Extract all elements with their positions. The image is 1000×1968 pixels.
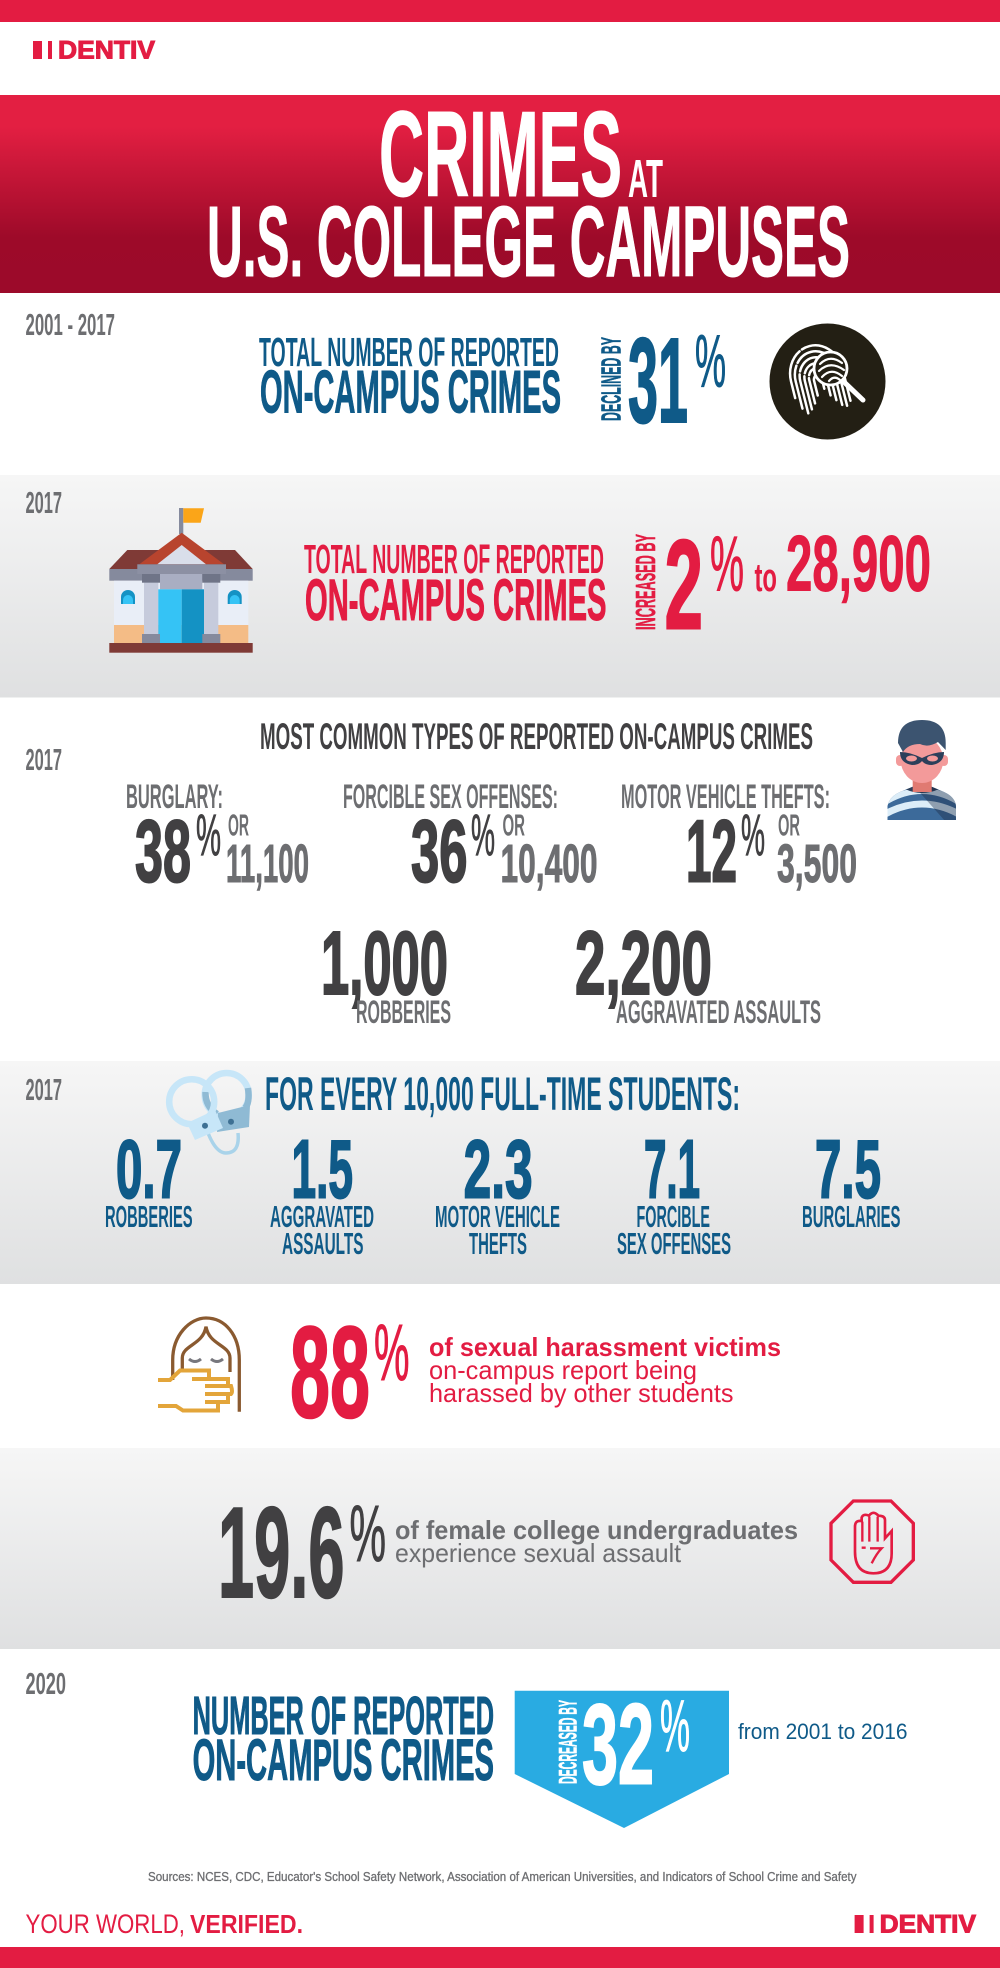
stat block: burglary: BURGLARY:	[126, 778, 223, 816]
tagline: VERIFIED.	[190, 1909, 303, 1939]
stat: burglaries rate	[802, 1122, 900, 1234]
stat block: forcible sex offenses: %	[471, 803, 495, 868]
stat block: motor vehicle thefts: OR	[778, 808, 800, 842]
connector: to: to	[754, 556, 777, 600]
panel: 2017 total increase	[0, 475, 1000, 698]
stat: aggravated assaults rate: ASSAULTS	[282, 1226, 364, 1261]
stat block: robberies: 1,000	[321, 914, 448, 1014]
year label: 2017	[26, 1072, 62, 1107]
description	[395, 1515, 798, 1568]
icon: masked thief	[888, 720, 956, 820]
stat: 19.6: 19.6	[218, 1481, 344, 1625]
arrow badge	[515, 1691, 729, 1828]
stat: forcible sex offenses rate	[617, 1122, 731, 1261]
stat: 88: 88	[290, 1299, 370, 1445]
icon: fingerprint and magnifier	[770, 324, 886, 440]
sources note: Sources: NCES, CDC, Educator's School Safety Network, Association of American Universities, and Indicators of School Crime and Safety	[148, 1870, 857, 1884]
stat: motor vehicle thefts rate: THEFTS	[469, 1226, 527, 1261]
stat: 2: 2	[664, 514, 703, 656]
stat: 32: 32	[582, 1682, 654, 1808]
icon: stop hand	[831, 1501, 913, 1582]
panel: 2020 decrease: %	[660, 1686, 690, 1767]
icon: college building	[109, 508, 253, 653]
panel: 2001-2017 decline: ON-CAMPUS CRIMES	[260, 358, 561, 426]
stat block: forcible sex offenses: 10,400	[500, 834, 598, 894]
description: on-campus report being	[429, 1355, 697, 1385]
logo: Identiv header: DENTIV	[58, 36, 155, 64]
stat block: robberies	[321, 914, 451, 1030]
stat block: forcible sex offenses	[343, 778, 598, 900]
heading line 2: ON-CAMPUS CRIMES	[193, 1728, 494, 1793]
stat block: burglary: 11,100	[226, 834, 309, 894]
panel: rates per 10,000 students	[0, 1061, 1000, 1284]
title: AT: AT	[628, 149, 663, 209]
stat block: forcible sex offenses: 36	[411, 802, 468, 900]
stat block: burglary: %	[196, 803, 221, 868]
stat block: burglary	[126, 778, 309, 900]
stat block: motor vehicle thefts: 12	[686, 802, 737, 900]
stat: forcible sex offenses rate: FORCIBLE	[636, 1199, 710, 1234]
stat block: burglary: 38	[135, 802, 191, 900]
title: CRIMES: CRIMES	[379, 86, 622, 222]
stat: robberies rate	[105, 1122, 193, 1234]
top red bar	[0, 0, 1000, 22]
stat block: burglary: OR	[228, 808, 249, 842]
description	[429, 1332, 781, 1408]
panel: sexual assault	[0, 1448, 1000, 1649]
year label: 2020	[26, 1666, 66, 1701]
panel: 2020 decrease: NUMBER OF REPORTED	[193, 1686, 494, 1746]
panel: 2001-2017 decline: DECLINED BY	[596, 337, 626, 421]
stat: aggravated assaults rate: 1.5	[292, 1122, 353, 1216]
panel: 2017 total increase: INCREASED BY	[630, 534, 661, 630]
stat: motor vehicle thefts rate	[435, 1122, 560, 1261]
stat: burglaries rate: 7.5	[815, 1122, 881, 1216]
icon: woman with hand over mouth	[158, 1318, 239, 1412]
panel: rates per 10,000 students: AGGRAVATED	[270, 1199, 374, 1234]
date range note: from 2001 to 2016	[738, 1719, 908, 1744]
year label: 2001 - 2017	[26, 307, 115, 342]
stat: aggravated assaults rate	[270, 1122, 374, 1261]
stat block: forcible sex offenses: OR	[502, 808, 525, 842]
stat: forcible sex offenses rate: 7.1	[644, 1122, 700, 1216]
panel: rates per 10,000 students: ROBBERIES	[105, 1199, 193, 1234]
panel: 2001-2017 decline: 31	[628, 312, 688, 448]
panel: most common crime types	[26, 720, 956, 1024]
description: experience sexual assault	[395, 1538, 682, 1568]
stat: motor vehicle thefts rate: 2.3	[464, 1122, 533, 1216]
description: of sexual harassment victims	[429, 1332, 781, 1362]
percent sign: %	[350, 1489, 386, 1578]
heading line 2: ON-CAMPUS CRIMES	[305, 568, 606, 633]
panel: 2017 total increase: TOTAL NUMBER OF REPORTED	[304, 536, 604, 582]
icon: handcuffs	[169, 1073, 250, 1153]
stat block: aggravated assaults: 2,200	[575, 914, 712, 1014]
bottom red bar	[0, 1947, 1000, 1968]
year label: 2017	[26, 742, 62, 777]
panel: 2001-2017 decline: TOTAL NUMBER OF REPORTED	[259, 329, 559, 375]
tagline: YOUR WORLD,	[26, 1909, 185, 1939]
panel: 2001-2017 decline	[0, 293, 1000, 475]
panel: 2020 decrease	[0, 1649, 1000, 1849]
stat: robberies rate: 0.7	[116, 1122, 182, 1216]
panel: 2001-2017 decline: %	[695, 320, 726, 402]
stat block: motor vehicle thefts: 3,500	[777, 834, 857, 894]
stat block: motor vehicle thefts	[621, 778, 857, 900]
panel: 2017 total increase: %	[710, 520, 744, 608]
panel: rates per 10,000 students: SEX OFFENSES	[617, 1226, 731, 1261]
logo: Identiv footer: DENTIV	[880, 1910, 976, 1938]
panel: title banner	[0, 86, 1000, 298]
panel: sexual harassment: %	[374, 1308, 410, 1397]
description: harassed by other students	[429, 1378, 734, 1408]
description: of female college undergraduates	[395, 1515, 798, 1545]
stat block: forcible sex offenses: FORCIBLE SEX OFFENSES:	[343, 778, 558, 816]
panel: most common crime types: ROBBERIES	[356, 994, 451, 1030]
panel: 2020 decrease: DECREASED BY	[554, 1700, 582, 1784]
tagline	[26, 1909, 303, 1939]
panel: rates per 10,000 students: MOTOR VEHICLE	[435, 1199, 560, 1234]
panel: sexual harassment	[0, 1284, 1000, 1448]
year label: 2017	[26, 485, 62, 520]
stat block: motor vehicle thefts: %	[741, 803, 765, 868]
